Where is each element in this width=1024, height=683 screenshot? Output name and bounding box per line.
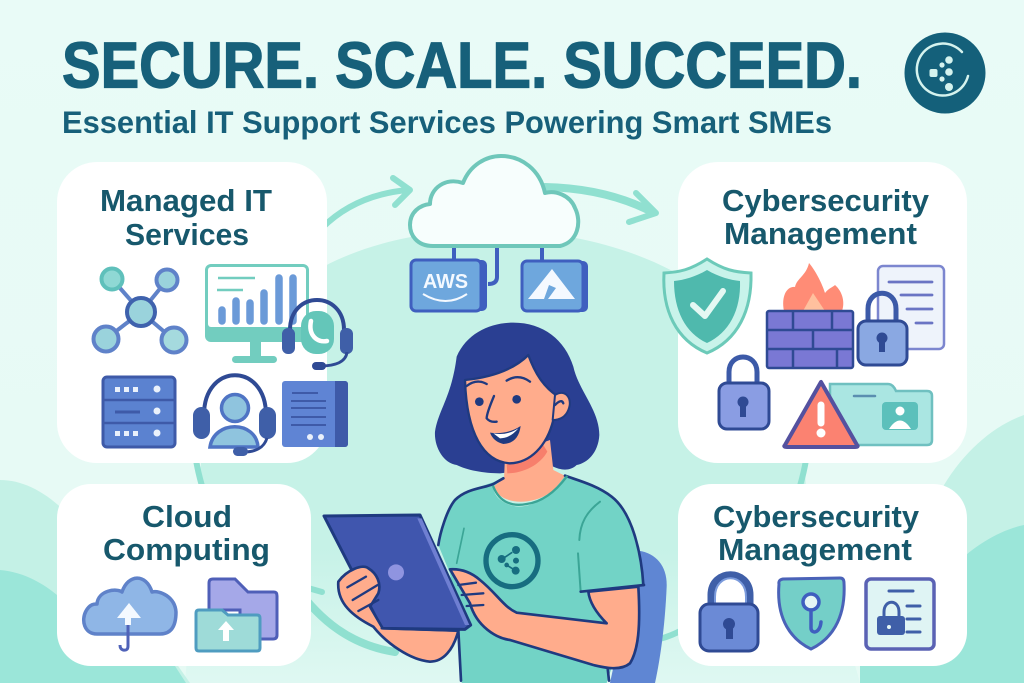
heading: cybersecurity management lower: [713, 500, 919, 567]
eyes and brows: [467, 377, 563, 422]
icon: network: [94, 268, 186, 352]
logo badge: [904, 32, 986, 114]
arrow: bottom left to cloud computing: [294, 584, 395, 652]
panel: cybersecurity management lower: [678, 484, 967, 666]
chair: [610, 551, 667, 683]
arc link: right side: [800, 460, 806, 486]
shirt: [438, 476, 643, 683]
fingers: [347, 577, 483, 631]
cloud with provider boxes: [410, 156, 578, 284]
icon: shield key: [779, 578, 844, 649]
illustration: woman with tablet: [324, 323, 667, 683]
icon: identity folder: [830, 384, 932, 445]
icon: lock document: [866, 579, 934, 649]
heading: cybersecurity management lower: Cybersecurity: [713, 500, 919, 534]
heading: cloud computing: Computing: [103, 533, 270, 567]
heading: cybersecurity management upper: Management: [724, 217, 917, 251]
heading: cybersecurity management upper: Cybersecurity: [722, 184, 929, 218]
icon: padlock right: [858, 293, 907, 365]
icon: headset with phone: [282, 300, 353, 370]
icon: document panel: [282, 381, 348, 447]
icon: AWS box: [411, 260, 487, 311]
heading: managed IT services: Managed IT: [100, 184, 272, 218]
mouth: [490, 426, 521, 444]
icon: shield check: [664, 259, 751, 353]
icon: azure box: [522, 261, 588, 312]
icon: support agent: [193, 375, 276, 456]
icon: cloud upload: [84, 578, 176, 650]
hair: [435, 323, 599, 473]
icon: AWS box: AWS: [423, 271, 468, 293]
panel: cloud computing: [57, 484, 311, 666]
shirt logo: [486, 535, 538, 587]
arrow: cloud to cybersecurity: [545, 187, 656, 222]
icon: document: [878, 266, 944, 349]
heading: cloud computing: Cloud: [142, 500, 232, 534]
panel: managed IT services: [57, 162, 327, 463]
tablet: [324, 515, 471, 629]
panel: cybersecurity management upper: [678, 162, 967, 463]
pupils: [475, 395, 521, 406]
title: SECURE. SCALE. SUCCEED.: [62, 28, 862, 102]
sleeve edge: [581, 585, 644, 592]
heading: managed IT services: [100, 184, 272, 252]
neck: [493, 440, 567, 502]
icon: firewall with flame: [767, 263, 853, 368]
right arm: [450, 569, 639, 668]
icon: warning triangle: [784, 382, 858, 447]
face: [465, 355, 557, 463]
arrow: managed IT to cloud: [322, 178, 410, 228]
icon: folders upload: [196, 579, 277, 651]
heading: cybersecurity management lower: Management: [718, 533, 912, 567]
ear: [553, 393, 570, 420]
icon: central cloud: [410, 156, 578, 246]
left hand and forearm: [338, 567, 458, 662]
icon: padlock lower: [700, 575, 758, 651]
heading: cloud computing: [103, 500, 270, 567]
heading: managed IT services: Services: [125, 218, 249, 252]
arrow: bottom right link: [655, 618, 700, 640]
subtitle: Essential IT Support Services Powering Smart SMEs: [62, 104, 832, 140]
icon: monitor chart: [205, 264, 309, 363]
heading: cybersecurity management upper: [722, 184, 929, 251]
arc link: left side: [196, 460, 202, 486]
icon: server rack: [103, 377, 175, 447]
icon: padlock left: [719, 357, 769, 429]
